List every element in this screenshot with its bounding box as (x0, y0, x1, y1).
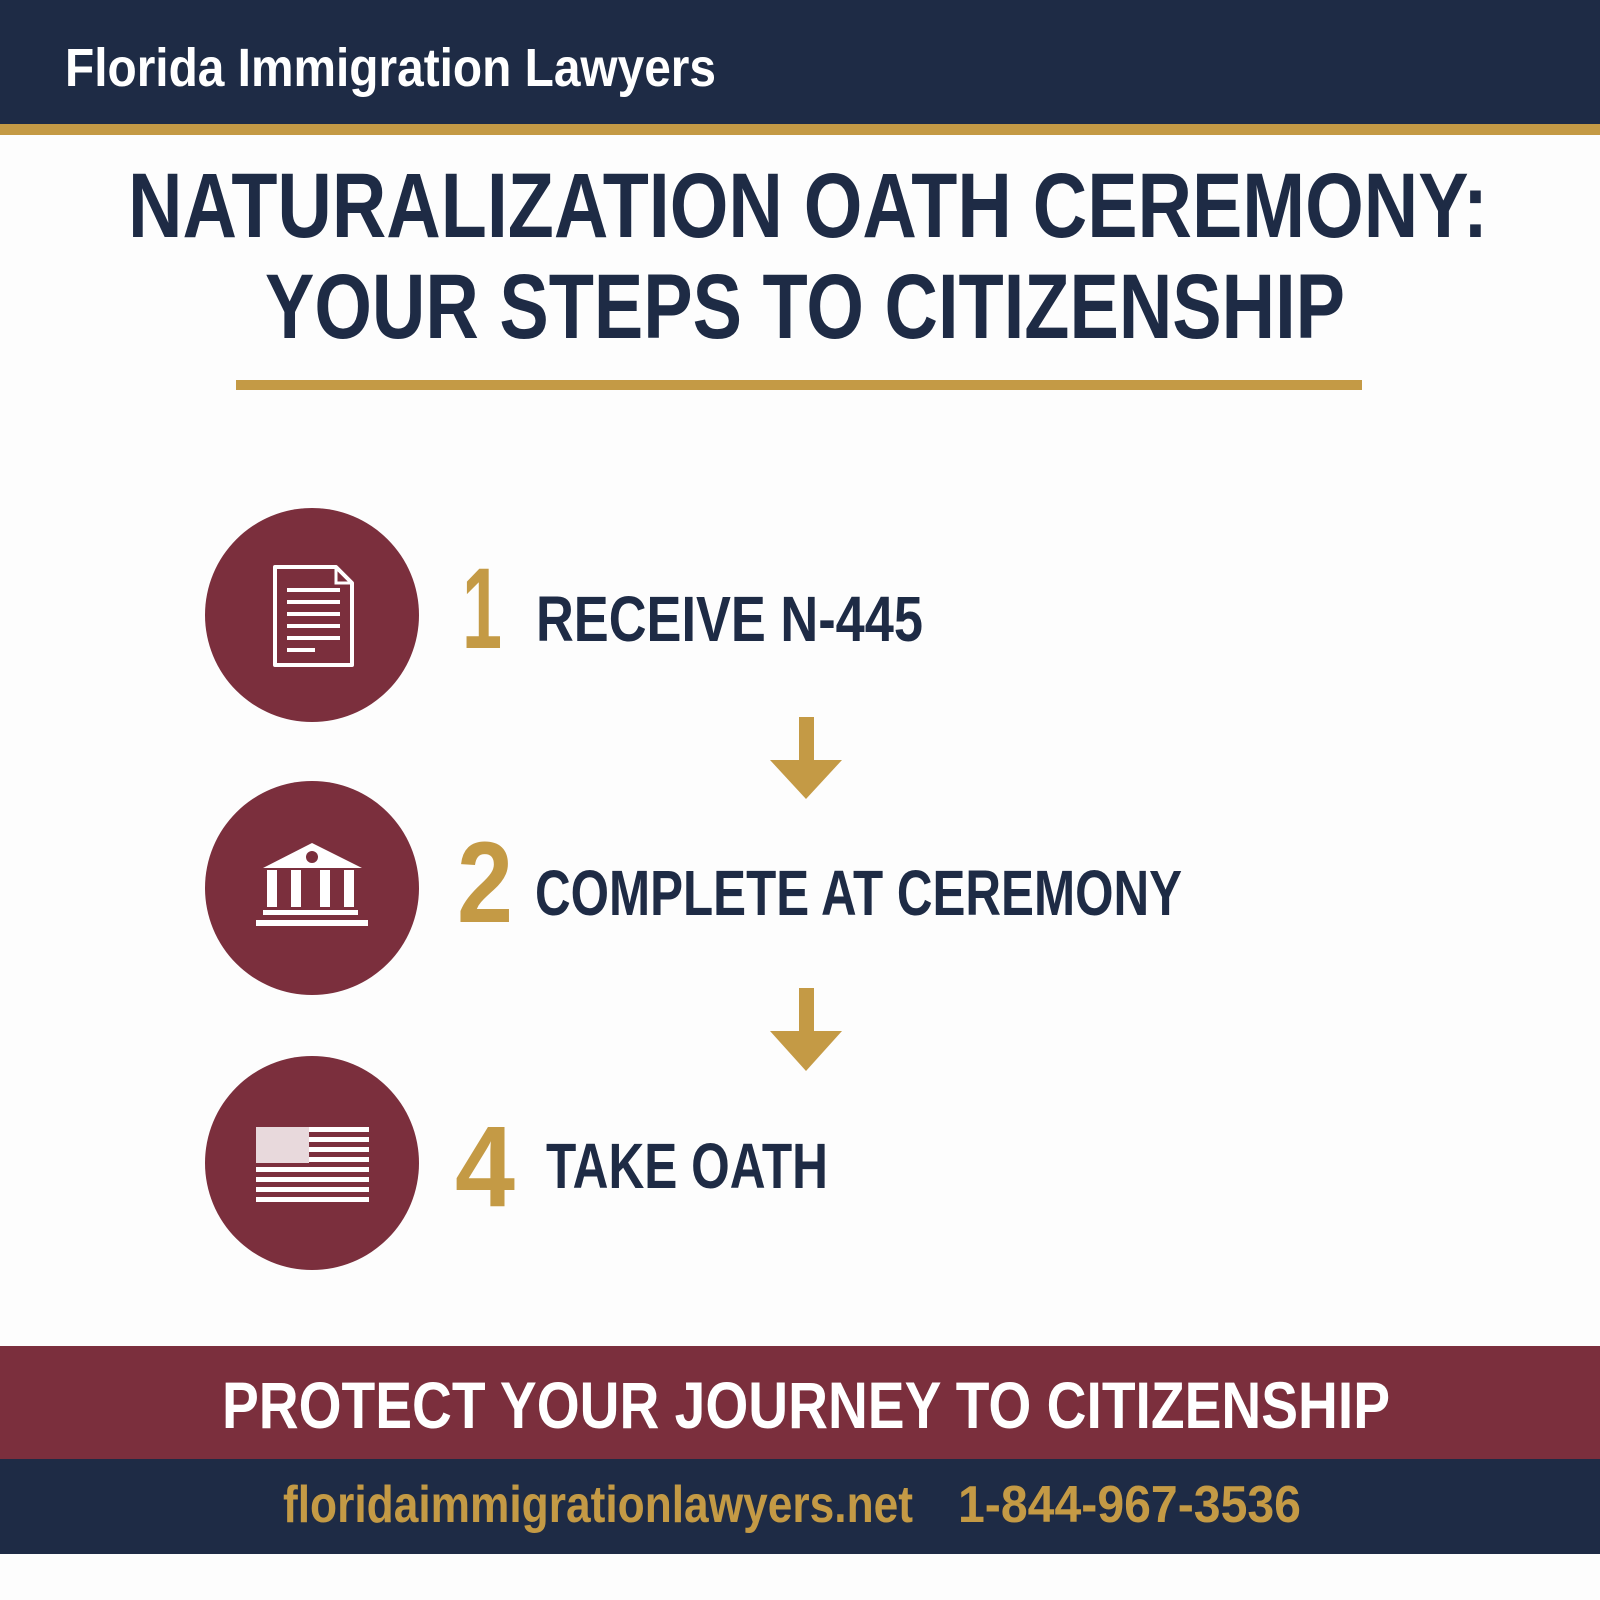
step label 2: COMPLETE AT CEREMONY (535, 857, 1182, 929)
step 1 (205, 508, 923, 722)
step 3 (205, 1056, 828, 1270)
icon: courthouse (205, 781, 419, 995)
arrow 2 (770, 988, 842, 1071)
step number 2: 2 (457, 819, 513, 947)
title (128, 155, 1488, 358)
footer contact bar: 1-844-967-3536 (958, 1476, 1301, 1534)
step 2 (205, 781, 1182, 995)
step label 4: TAKE OATH (546, 1130, 828, 1202)
step label 1: RECEIVE N-445 (536, 583, 923, 655)
footer banner: call to action: PROTECT YOUR JOURNEY TO CITIZENSHIP (222, 1368, 1390, 1442)
footer banner: call to action (0, 1346, 1600, 1459)
step number 4: 4 (455, 1103, 515, 1231)
header brand text: Florida Immigration Lawyers (65, 38, 716, 98)
icon: document (205, 508, 419, 722)
title underline (236, 380, 1362, 390)
title: YOUR STEPS TO CITIZENSHIP (265, 256, 1345, 358)
icon: US flag (205, 1056, 419, 1270)
footer contact bar (0, 1459, 1600, 1554)
step number 1: 1 (462, 545, 502, 673)
arrow 1 (770, 717, 842, 799)
header bar (0, 0, 1600, 135)
footer contact bar: floridaimmigrationlawyers.net (283, 1476, 913, 1534)
